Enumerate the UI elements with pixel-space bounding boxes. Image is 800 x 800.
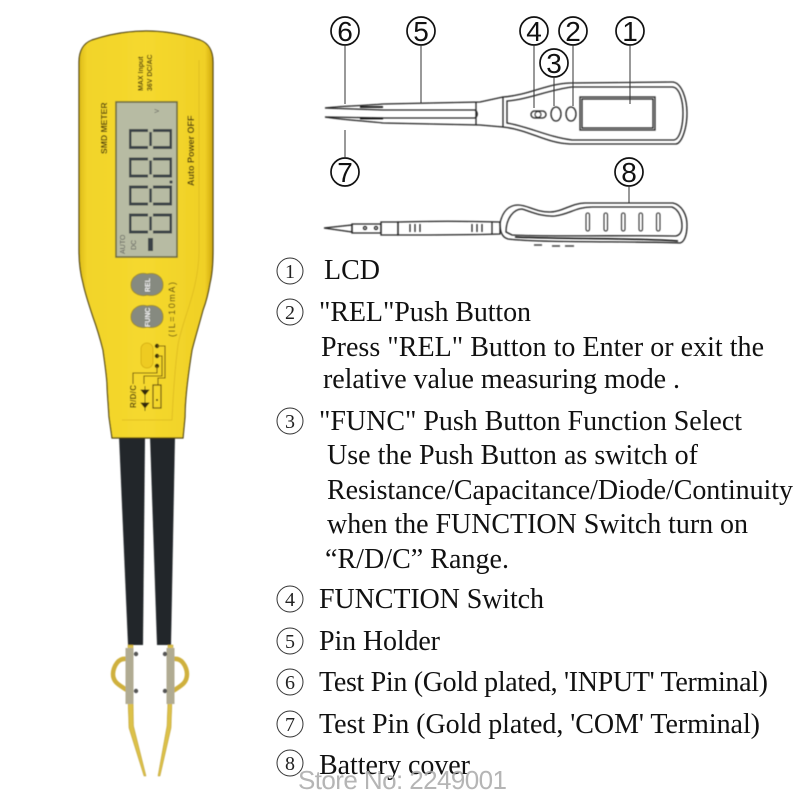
callout 5 (407, 16, 435, 47)
button: FUNC (131, 305, 163, 328)
legend item 8: Battery cover (319, 750, 471, 781)
callout 1: 1 (622, 16, 638, 47)
label: SMD METER: SMD METER (99, 102, 109, 154)
legend item 6: 6 (285, 672, 295, 694)
legend item 3 (277, 406, 793, 575)
callout 2 (559, 16, 587, 47)
LCD digits (129, 129, 173, 251)
diagram: side view (324, 203, 687, 246)
LCD annotation: V: V (155, 109, 161, 113)
photo: SMD meter (79, 31, 213, 776)
legend item 1: 1 (285, 261, 295, 283)
gold test pins (113, 645, 187, 776)
legend item 1: LCD (324, 255, 380, 286)
legend item 2: 2 (285, 302, 295, 324)
body inner contour (122, 60, 199, 420)
switch label: R/D/C (129, 385, 138, 408)
callout leader lines (345, 46, 630, 203)
legend item 4: FUNCTION Switch (319, 584, 544, 615)
callout 6 (331, 16, 359, 47)
legend item 1 (277, 255, 380, 286)
callout 3: 3 (546, 48, 562, 79)
callout 1 (616, 16, 644, 47)
callout 2: 2 (565, 16, 581, 47)
meter body (79, 31, 213, 438)
function switch (129, 343, 165, 411)
callout 4: 4 (526, 16, 542, 47)
LCD annotation: AUTO: AUTO (120, 234, 127, 254)
legend item 2 (277, 297, 764, 395)
watermark: store number: Store No: 2249001 (298, 765, 507, 795)
legend item 3: Use the Push Button as switch of (327, 440, 699, 471)
LCD annotation: DC: DC (131, 240, 138, 250)
legend item 7: Test Pin (Gold plated, 'COM' Terminal) (319, 709, 760, 740)
callout 3 (540, 48, 568, 79)
callout 4 (520, 16, 548, 47)
label: voltage: 36V DC/AC (147, 54, 154, 91)
legend item 2: relative value measuring mode . (323, 364, 680, 395)
legend item 3: "FUNC" Push Button Function Select (319, 406, 742, 437)
button: FUNC: FUNC (145, 308, 152, 327)
button: REL: REL (145, 277, 152, 292)
button: REL (131, 273, 163, 296)
legend item 3: 3 (285, 411, 295, 433)
legend item 7: 7 (285, 714, 295, 736)
LCD screen (116, 102, 177, 257)
callout 8: 8 (621, 157, 637, 188)
legend item 5: 5 (285, 631, 295, 653)
legend item 5: Pin Holder (319, 626, 441, 657)
callout 5: 5 (413, 16, 429, 47)
callout 7 (331, 157, 359, 188)
test lead tubes (119, 436, 175, 645)
legend item 3: Resistance/Capacitance/Diode/Continuity (327, 475, 793, 506)
legend item 2: "REL"Push Button (319, 297, 531, 328)
label: IL=10mA: (IL=10mA) (167, 282, 177, 337)
legend item 8: 8 (285, 753, 295, 775)
diagram: top view (325, 82, 687, 144)
callout 7: 7 (337, 157, 353, 188)
legend item 4: 4 (285, 589, 295, 611)
callout 8 (615, 157, 643, 188)
legend item 2: Press "REL" Button to Enter or exit the (321, 332, 764, 363)
legend item 3: “R/D/C” Range. (325, 544, 509, 575)
label: max input: MAX Input (138, 56, 145, 91)
callout 6: 6 (337, 16, 353, 47)
legend item 6: Test Pin (Gold plated, 'INPUT' Terminal) (319, 667, 768, 698)
legend item 3: when the FUNCTION Switch turn on (327, 509, 748, 540)
label: auto power off: Auto Power OFF (186, 115, 196, 186)
